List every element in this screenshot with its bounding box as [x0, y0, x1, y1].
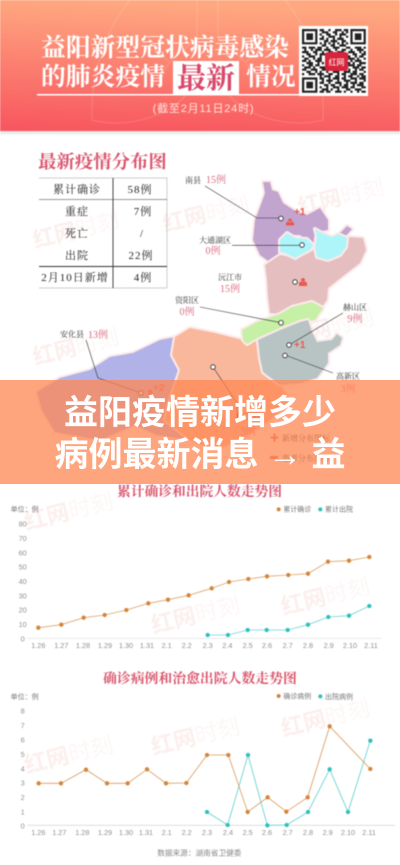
region labels: 0例 — [206, 244, 220, 257]
headline line 1: 益阳疫情新增多少 — [64, 394, 336, 432]
header title — [41, 33, 296, 91]
chart 2 x axis — [27, 825, 395, 837]
chart 1 x axis: 1.29 — [98, 641, 112, 650]
chart 2 y axis: 3 — [21, 779, 25, 788]
map regions — [37, 182, 366, 450]
chart 1 x axis: 2.8 — [303, 641, 313, 650]
chart 2 y axis: 5 — [21, 750, 25, 759]
watermarks on map: 红网时刻 — [30, 324, 122, 370]
icon: patient Yuanjiang — [299, 278, 307, 286]
data source: 数据来源：湖南省卫健委 — [157, 848, 242, 858]
chart 2 watermarks: 红网时刻 — [278, 694, 372, 742]
map legend: ✚ — [270, 433, 279, 443]
chart 2 unit and legend: 确诊病例 — [283, 692, 311, 701]
headline line 2: 病例最新消息 → 益 — [55, 436, 345, 474]
headline band — [0, 380, 400, 484]
chart 1 x axis: 2.2 — [182, 641, 192, 650]
chart 1 x axis: 2.7 — [283, 641, 293, 650]
case table: 22例 — [128, 248, 154, 262]
section heading: distribution: 最新疫情分布图 — [38, 151, 167, 172]
chart 1 discharged series — [205, 604, 371, 637]
icon: patient Anhua — [148, 390, 152, 394]
chart 1 y axis: 20 — [19, 606, 27, 615]
chart 2 x axis: 2.10 — [341, 828, 355, 837]
region labels: 沅江市 — [218, 272, 242, 282]
chart 1 unit and legend: 单位：例 — [11, 505, 39, 514]
chart 2 y axis — [21, 707, 25, 830]
watermarks on map — [30, 174, 387, 370]
chart 1 x axis: 2.1 — [162, 641, 172, 650]
case table: 重症 — [65, 204, 89, 218]
chart 2 x axis: 2.2 — [182, 828, 192, 837]
highlighted word: 最新 — [177, 62, 235, 95]
chart 1 x axis: 1.31 — [140, 641, 154, 650]
chart 2 x axis: 2.9 — [323, 828, 333, 837]
chart 1 x axis: 2.10 — [343, 641, 357, 650]
chart 1: cumulative confirmed and discharged — [11, 483, 382, 650]
chart 1 y axis: 60 — [19, 548, 27, 557]
chart 2 y axis: 8 — [21, 707, 25, 716]
chart 1 x axis: 1.26 — [31, 641, 45, 650]
region labels: 9例 — [348, 312, 362, 325]
chart 1 x axis — [27, 638, 382, 650]
case table: 4例 — [134, 270, 152, 284]
chart 1 heading: 累计确诊和出院人数走势图 — [117, 483, 282, 499]
region labels: 安化县 — [60, 329, 84, 339]
region labels: 大通湖区 — [199, 235, 231, 245]
chart 1 watermarks — [22, 488, 372, 638]
chart 1 y axis: 50 — [19, 563, 27, 572]
case table: 累计确诊 — [53, 182, 101, 196]
region: Heshan — [258, 320, 342, 385]
chart 2 x axis: 1.29 — [98, 828, 112, 837]
chart 2 x axis: 2.7 — [283, 828, 293, 837]
case table: 2月10日新增 — [41, 271, 109, 284]
chart 1 x axis: 2.9 — [324, 641, 334, 650]
QR logo: 红网 — [328, 57, 344, 67]
case table: 58例 — [128, 182, 152, 196]
increment labels: +2 — [153, 383, 165, 394]
region labels — [60, 173, 367, 438]
header banner — [0, 0, 400, 136]
chart 1 x axis: 2.5 — [243, 641, 253, 650]
case table: 死亡 — [65, 226, 89, 240]
chart 2 unit and legend: 单位：例 — [11, 692, 39, 701]
chart 2 confirmed series — [36, 724, 372, 814]
chart 1 x axis: 2.11 — [364, 641, 378, 650]
chart 2 x axis: 1.27 — [52, 828, 66, 837]
chart 2 unit and legend: 出院病例 — [325, 692, 353, 701]
chart 2 x axis: 2.11 — [362, 828, 376, 837]
chart 2 x axis: 1.31 — [139, 828, 153, 837]
chart 1 y axis: 30 — [19, 591, 27, 600]
case table: / — [140, 228, 144, 240]
case table: 出院 — [65, 248, 89, 262]
chart 2 watermarks — [22, 694, 372, 778]
chart 1 unit and legend: 累计出院 — [325, 505, 353, 514]
region: Yuanjiang — [265, 237, 366, 314]
chart 2 x axis: 2.5 — [243, 828, 253, 837]
header title: 情况 — [246, 63, 296, 91]
chart 1 watermarks: 红网时刻 — [278, 573, 372, 620]
case table — [39, 178, 167, 288]
header title: 的肺炎疫情 — [41, 63, 165, 91]
region labels: 13例 — [88, 328, 108, 341]
region labels: 赫山区 — [343, 302, 367, 312]
chart 1 y axis: 80 — [19, 520, 27, 529]
chart 2 y axis: 1 — [21, 807, 25, 816]
case table: 7例 — [134, 204, 152, 218]
increment labels — [153, 207, 306, 394]
map legend: 新增分布图标 — [282, 433, 331, 443]
map legend — [270, 433, 331, 463]
region labels: 3例 — [340, 382, 356, 395]
region: Ziyang — [242, 302, 323, 344]
region labels: 15例 — [220, 282, 240, 295]
chart 2 y axis: 0 — [21, 821, 25, 830]
chart 2 watermarks: 红网时刻 — [22, 731, 116, 778]
watermarks on map: 红网时刻 — [30, 207, 122, 253]
chart 1 y axis — [19, 520, 27, 643]
date note: (截至2月11日24时) — [153, 101, 254, 115]
watermarks on map: 红网时刻 — [160, 191, 252, 237]
chart 2 y axis: 6 — [21, 736, 25, 745]
chart 1 y axis: 40 — [19, 577, 27, 586]
chart 1 unit and legend: 累计确诊 — [283, 505, 311, 514]
chart 2 x axis: 2.3 — [202, 828, 212, 837]
map legend: 患者分布图标 — [282, 453, 331, 463]
lake: east — [315, 229, 347, 260]
chart 2 heading: 确诊病例和治愈出院人数走势图 — [103, 670, 297, 686]
chart 1 y axis: 0 — [21, 634, 25, 643]
QR code — [299, 26, 368, 96]
chart 2 x axis: 2.8 — [303, 828, 313, 837]
icon: patient Nanxian — [286, 218, 294, 226]
chart 2 unit and legend — [11, 692, 353, 701]
chart 1 x axis: 2.6 — [262, 641, 272, 650]
chart 1 x axis: 1.27 — [54, 641, 68, 650]
chart 2 x axis: 1.26 — [31, 828, 45, 837]
chart 1 x axis: 1.30 — [119, 641, 133, 650]
chart 2 x axis: 2.1 — [162, 828, 172, 837]
chart 2 x axis: 1.28 — [75, 828, 89, 837]
region: Taojiang — [165, 328, 290, 450]
region labels: 桃江县 — [236, 411, 260, 421]
chart 2 y axis: 4 — [21, 764, 25, 773]
region: Anhua — [37, 337, 190, 440]
chart 2 x axis: 1.30 — [119, 828, 133, 837]
region labels: 高新区 — [336, 371, 360, 381]
watermarks on map: 红网时刻 — [285, 304, 377, 350]
chart 1 y axis: 70 — [19, 534, 27, 543]
chart 1 confirmed series — [36, 555, 371, 630]
chart 2 x axis: 2.4 — [223, 828, 233, 837]
map markers — [139, 216, 304, 395]
lake: Datonghu — [280, 233, 313, 258]
region labels: 0例 — [180, 305, 194, 318]
chart 1 y axis: 10 — [19, 620, 27, 629]
chart 1 x axis: 2.3 — [203, 641, 213, 650]
chart 2 discharged series — [205, 738, 372, 827]
increment labels: +1 — [294, 207, 306, 218]
region labels: 15例 — [206, 173, 226, 186]
region labels: 南县 — [185, 175, 201, 185]
leader lines — [86, 186, 343, 420]
chart 1 x axis: 2.4 — [222, 641, 232, 650]
chart 2 y axis: 2 — [21, 793, 25, 802]
chart 2 x axis: 2.6 — [262, 828, 272, 837]
chart 2 watermarks: 红网时刻 — [148, 713, 242, 760]
region labels: 资阳区 — [175, 295, 199, 305]
chart 2: daily confirmed and recovered — [11, 670, 395, 858]
region labels: 3例 — [240, 425, 256, 438]
map section — [30, 151, 387, 463]
chart 1 x axis: 1.28 — [76, 641, 90, 650]
header title: 益阳新型冠状病毒感染 — [41, 33, 289, 62]
watermarks on map: 红网时刻 — [295, 174, 387, 220]
chart 1 unit and legend — [11, 505, 353, 514]
region: Nanxian — [253, 182, 328, 261]
chart 1 watermarks: 红网时刻 — [22, 488, 116, 535]
chart 2 y axis: 7 — [21, 721, 25, 730]
increment labels: +1 — [294, 340, 306, 351]
chart 1 watermarks: 红网时刻 — [148, 591, 242, 638]
